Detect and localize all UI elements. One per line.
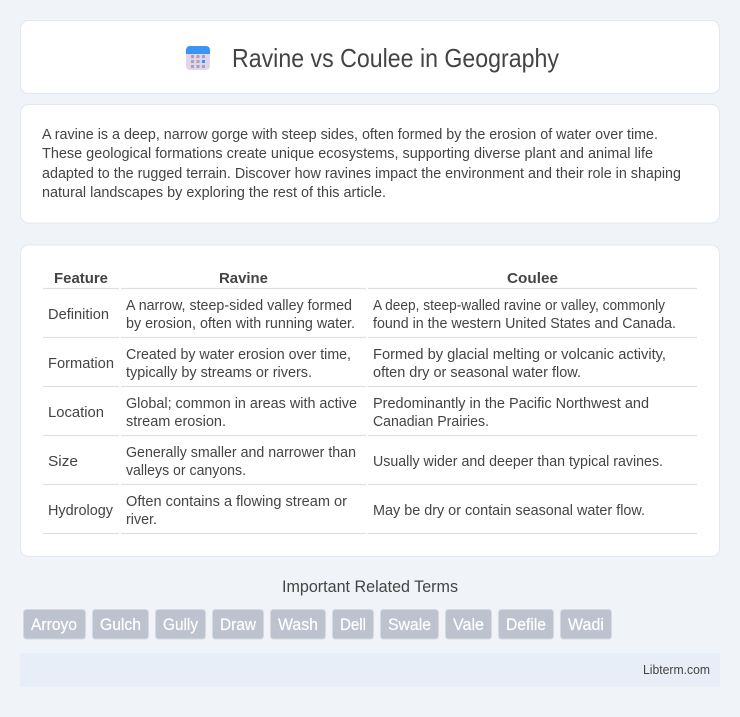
row: definition: Definition [48,306,109,323]
panel: comparison table [20,245,720,556]
related term tags: Draw [220,615,257,634]
related term tags: Arroyo [31,615,77,634]
row: location: Location [48,404,104,421]
icon: calendar [186,46,210,70]
related term tags: Wadi [568,615,604,634]
row: formation: Formation [48,355,114,372]
heading: important related terms: Important Related Terms [282,577,458,596]
row: hydrology: May be dry or contain seasonal water flow. [373,502,645,519]
intro text: natural landscapes by exploring the rest of this article. [42,184,386,201]
row: size: valleys or canyons. [126,462,246,479]
row: hydrology: river. [126,511,157,528]
row: size: Generally smaller and narrower than [126,444,356,461]
row: formation [48,346,666,381]
row: formation: often dry or seasonal water flow. [373,364,581,381]
panel: introduction [20,104,720,223]
related term tags: Wash [278,615,318,634]
table header: Feature [54,270,108,287]
related term tags: Gully [163,615,198,634]
row: definition [48,297,676,332]
table header: Coulee [507,270,558,287]
row: size: Usually wider and deeper than typical ravines. [373,453,663,470]
row: formation: Created by water erosion over time, [126,346,351,363]
row: hydrology: Hydrology [48,502,113,519]
table header: Ravine [219,270,268,287]
row: location: stream erosion. [126,413,226,430]
intro text: These geological formations create unique ecosystems, supporting diverse plant and animal life [42,145,653,162]
panel: title card [20,20,720,94]
related term tags: Gulch [100,615,141,634]
row: hydrology [48,493,645,528]
row: formation: typically by streams or rivers. [126,364,312,381]
intro text: adapted to the rugged terrain. Discover how ravines impact the environment and their role in shaping [42,165,681,182]
intro text [42,126,681,201]
row: formation: Formed by glacial melting or volcanic activity, [373,346,666,363]
related term tags: Swale [388,615,431,634]
row: definition: A deep, steep-walled ravine or valley, commonly [373,297,665,314]
footer: Libterm.com [643,663,710,677]
row: size: Size [48,453,78,470]
row: definition: by erosion, often with running water. [126,315,355,332]
related term tags [24,610,612,639]
row: hydrology: Often contains a flowing stream or [126,493,347,510]
row: location [48,395,649,430]
related term tags: Vale [453,615,484,634]
row: location: Global; common in areas with active [126,395,357,412]
table header [54,270,558,287]
intro text: A ravine is a deep, narrow gorge with steep sides, often formed by the erosion of water over time. [42,126,658,143]
row: size [48,444,663,479]
related term tags: Defile [506,615,546,634]
related term tags: Dell [340,615,366,634]
title: Ravine vs Coulee in Geography [232,43,559,73]
row: location: Predominantly in the Pacific Northwest and [373,395,649,412]
footer [20,653,720,687]
row: location: Canadian Prairies. [373,413,489,430]
row: definition: found in the western United States and Canada. [373,315,676,332]
row: definition: A narrow, steep-sided valley formed [126,297,352,314]
